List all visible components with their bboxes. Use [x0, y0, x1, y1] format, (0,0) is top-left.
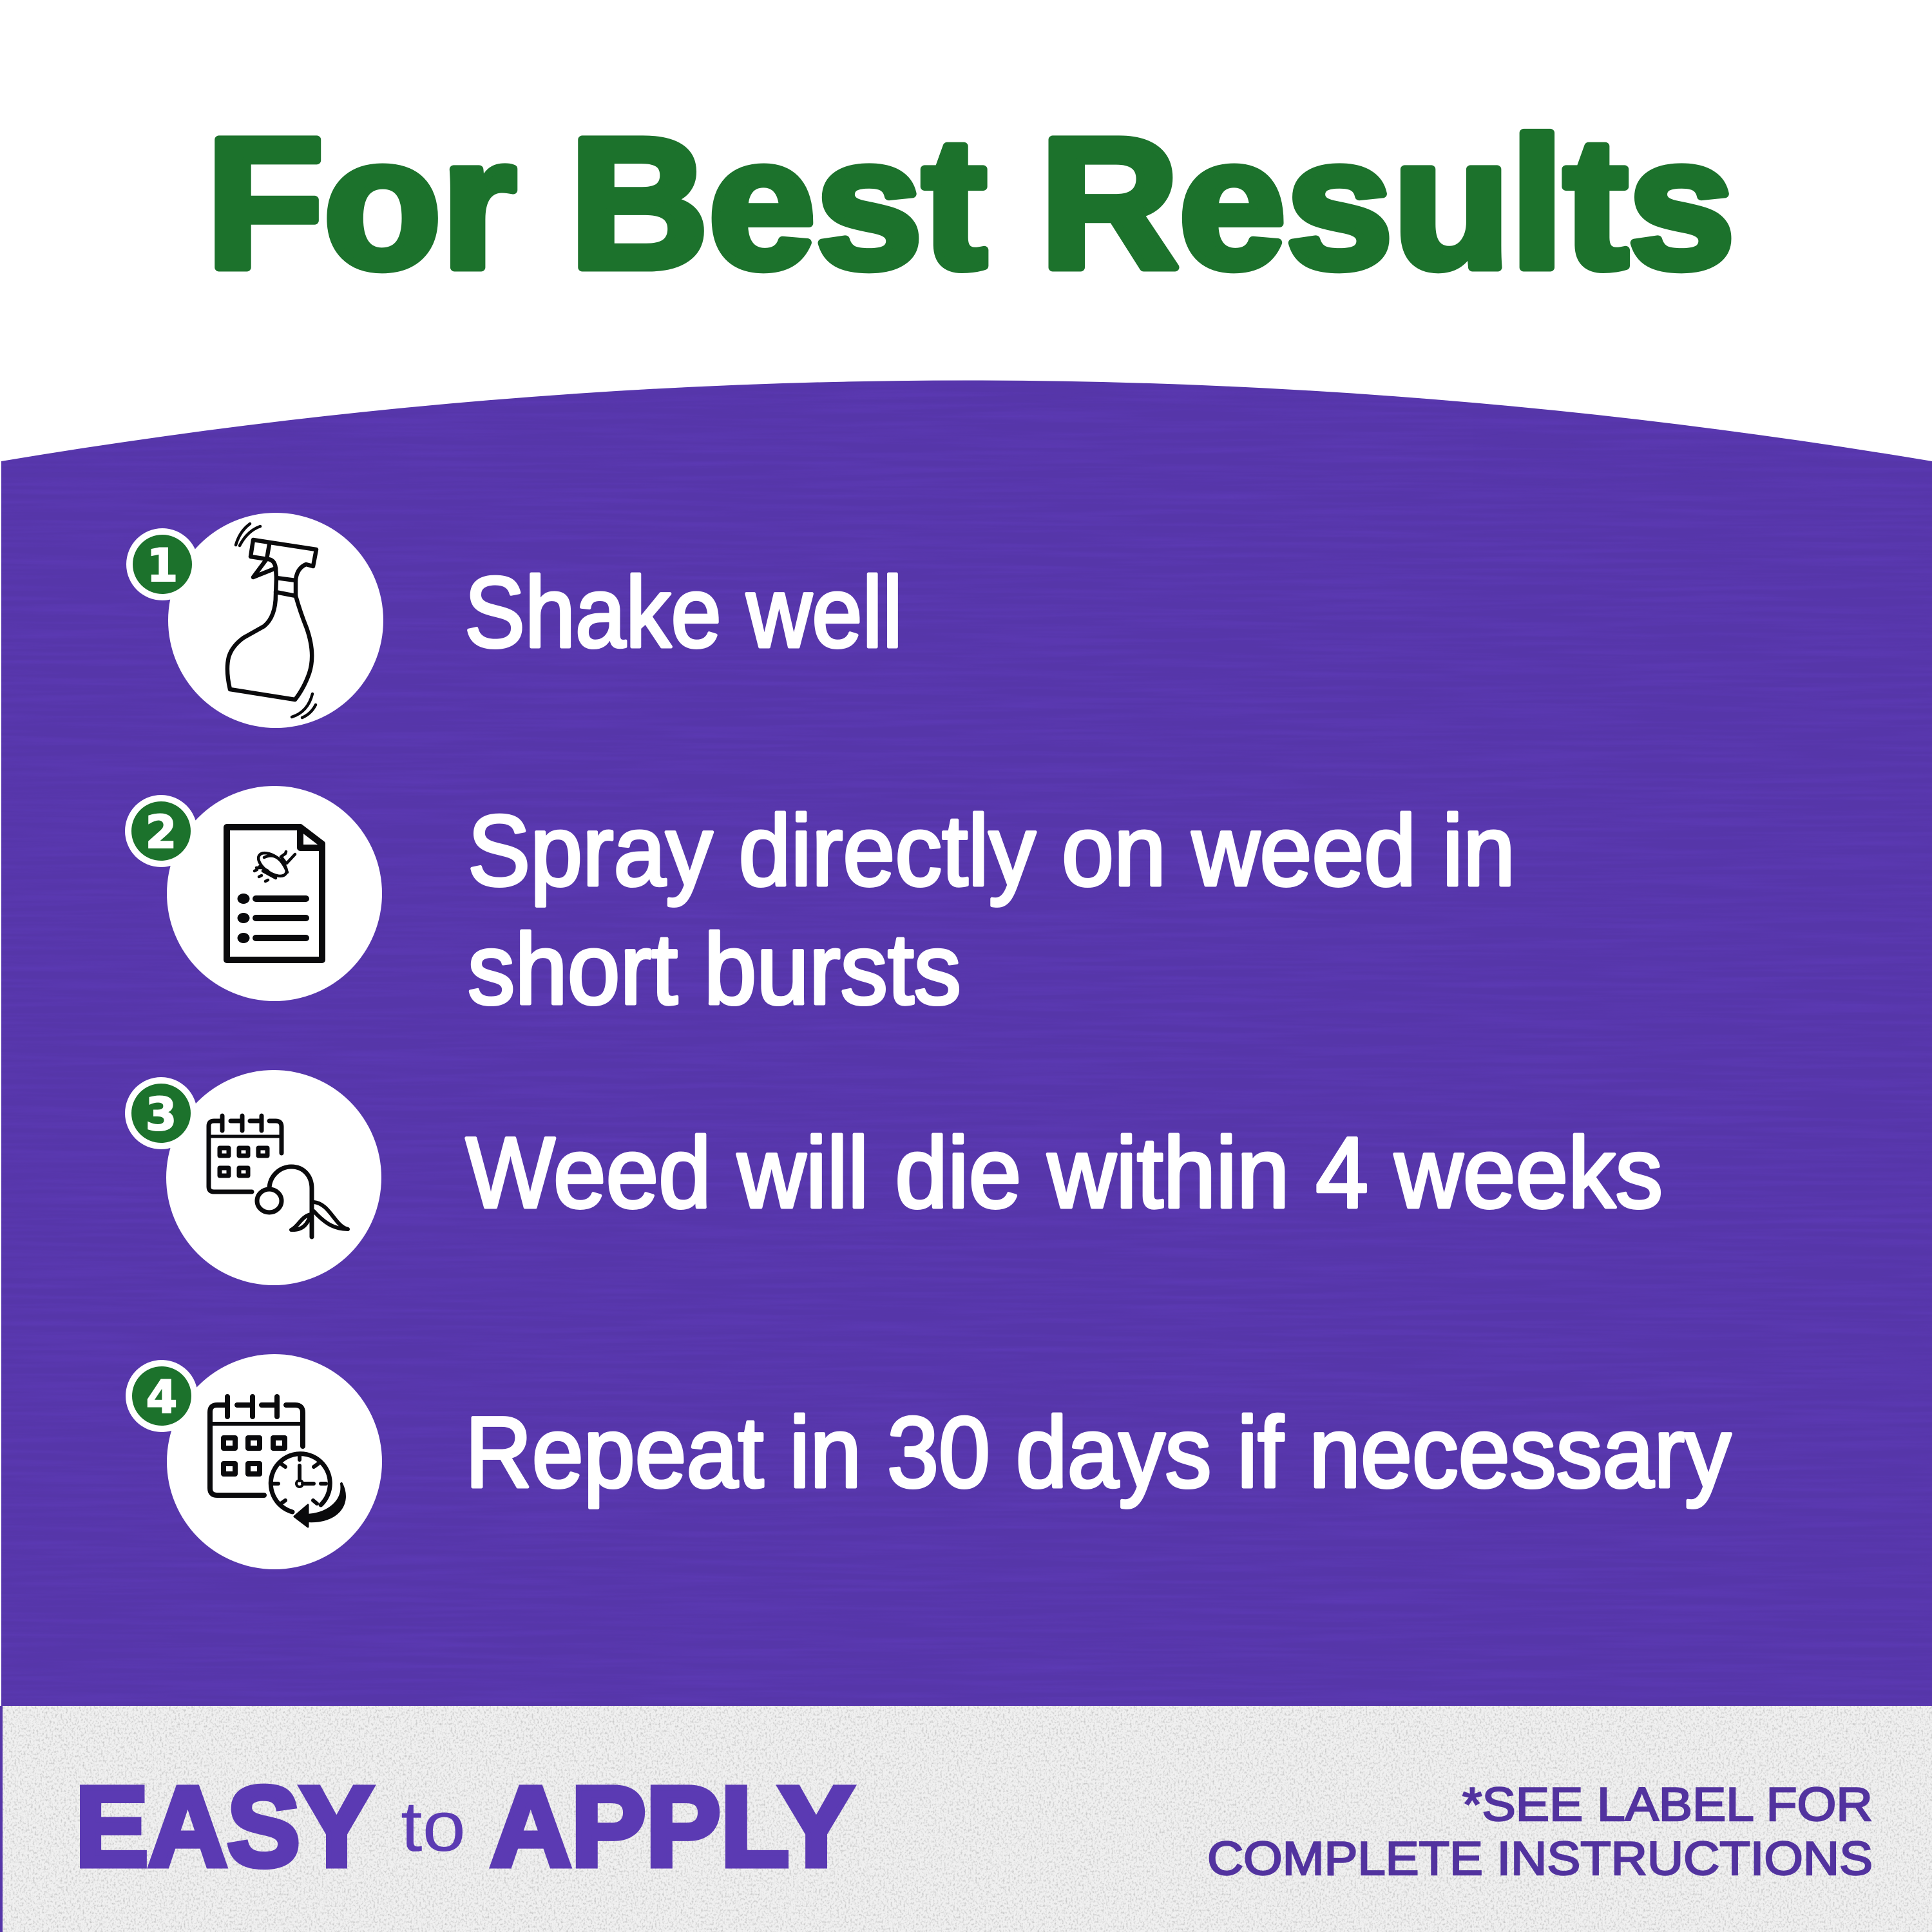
icon: calendar and wilted weed — [209, 1116, 348, 1237]
icon: spray bottle — [227, 524, 316, 718]
footer heading: easy to apply: EASY — [75, 1764, 373, 1890]
footer heading: easy to apply: to — [401, 1787, 466, 1866]
text: repeat in 30 days: Repeat in 30 days if necessary — [465, 1397, 1731, 1509]
title: For Best Results — [206, 100, 1735, 307]
panel: grey plaster footer — [0, 1706, 1932, 1932]
text: weed will die: Weed will die within 4 weeks — [466, 1117, 1663, 1229]
badge 1: 1 — [147, 539, 178, 592]
step 3 — [125, 1070, 1663, 1285]
text: spray directly: short bursts — [468, 913, 961, 1026]
icon circle 2 — [167, 786, 382, 1001]
step 4 — [126, 1354, 1731, 1569]
badge 1 — [126, 528, 198, 600]
icon: instruction document — [227, 827, 322, 960]
icon circle 3 — [166, 1070, 381, 1285]
text: spray directly — [468, 795, 1515, 1026]
badge 2 — [125, 795, 197, 867]
icon circle 4 — [167, 1354, 382, 1569]
badge 2: 2 — [146, 806, 177, 859]
footer heading: easy to apply — [75, 1764, 854, 1890]
badge 4 — [126, 1360, 198, 1432]
badge 4: 4 — [146, 1371, 177, 1424]
footnote: see label — [1207, 1779, 1873, 1885]
step 1 — [126, 513, 903, 728]
icon circle 1 — [168, 513, 383, 728]
footnote: see label: COMPLETE INSTRUCTIONS — [1207, 1833, 1873, 1885]
badge 3 — [125, 1077, 197, 1149]
text: spray directly: Spray directly on weed in — [468, 795, 1515, 907]
text: shake well: Shake well — [464, 557, 903, 669]
footnote: see label: *SEE LABEL FOR — [1462, 1779, 1873, 1831]
badge 3: 3 — [146, 1088, 177, 1141]
panel: purple textured background — [0, 374, 1932, 1707]
icon: calendar, clock and return arrow — [210, 1397, 345, 1527]
footer heading: easy to apply: APPLY — [490, 1764, 854, 1890]
step 2 — [125, 786, 1515, 1026]
